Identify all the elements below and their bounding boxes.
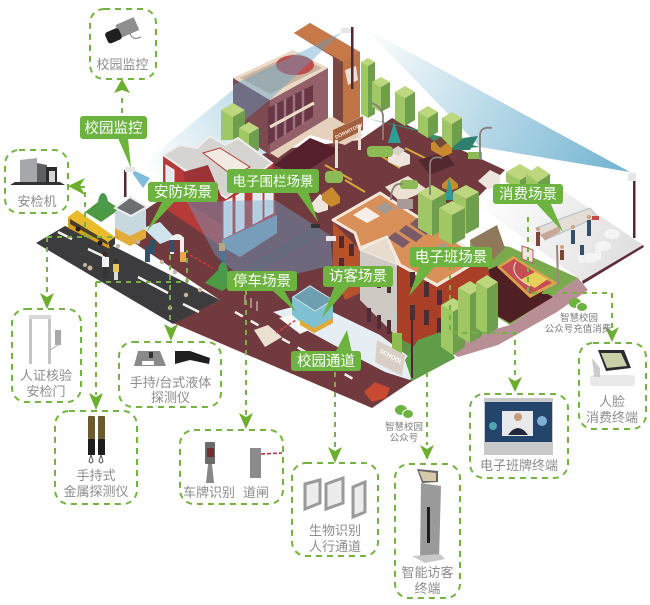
icon: class board screen: [484, 398, 553, 455]
scene label: electronic fence: 电子围栏场景: [232, 174, 314, 189]
camera beam over security building: [187, 200, 333, 285]
scene label: security: [147, 182, 218, 231]
icon: walk-through gate: [29, 315, 61, 364]
scene label: consumption: [493, 184, 563, 232]
school bus: [68, 210, 115, 249]
security checkpoint gates and crowd: [83, 222, 258, 311]
device card: plate recognition and barrier: 车牌识别: [183, 485, 235, 500]
device card: handheld and desktop liquid detector: 探测仪: [151, 390, 190, 405]
device card: handheld metal detector: 金属探测仪: [63, 484, 129, 499]
arrow heads: [40, 79, 619, 463]
scene label: campus monitoring: 校园监控: [84, 120, 142, 137]
street lamps and cameras: [371, 103, 492, 200]
device card: handheld and desktop liquid detector: [119, 342, 221, 407]
dormitory sign: [333, 116, 365, 168]
bleachers: [470, 225, 505, 268]
scene label: visitor: [322, 266, 393, 318]
device card: handheld metal detector: [55, 411, 137, 504]
device card: visitor kiosk: 终端: [414, 581, 441, 596]
trees near gate: [98, 193, 228, 284]
scene label: campus monitoring: [80, 116, 147, 168]
device card: face payment terminal: [579, 343, 646, 429]
icon: kiosk: [412, 469, 445, 563]
scene label: consumption: 消费场景: [499, 186, 557, 203]
device card: handheld metal detector: 手持式: [76, 468, 116, 483]
WeChat public account: top-up: 智慧校园: [560, 312, 598, 324]
scene label: electronic class board: [409, 247, 492, 296]
icon: plate recognition camera: [205, 442, 215, 483]
front tree blocks: [418, 185, 498, 355]
device card: biometric pedestrian gate: 人行通道: [309, 539, 361, 554]
device card: ID verification gate: 人证核验: [20, 368, 72, 383]
gatehouse: [115, 196, 147, 246]
icon: security camera: [104, 17, 141, 44]
WeChat public account: campus: [385, 405, 423, 444]
icon: road barrier gate: [250, 448, 282, 478]
icon: metal detector wands: [88, 416, 105, 463]
school sign: SCHOOL: [378, 349, 404, 366]
icon: handheld detector: [175, 351, 210, 364]
icon: turnstiles: [305, 478, 365, 517]
device card: biometric pedestrian gate: 生物识别: [309, 523, 361, 538]
consumption plaza: [478, 175, 643, 281]
electronic fence: [245, 225, 320, 278]
device card: visitor kiosk: 智能访客: [401, 565, 454, 580]
court ground shadow: [440, 278, 588, 357]
device card: ID verification gate: [12, 309, 81, 402]
device card: biometric pedestrian gate: [292, 463, 378, 556]
device card: handheld and desktop liquid detector: 手持/台式液体: [130, 375, 211, 390]
parking booth and plate reader: [254, 285, 390, 402]
basketball court: [462, 245, 558, 323]
scene label: campus passage: 校园通道: [297, 353, 355, 370]
scene label: visitor: 访客场景: [329, 268, 387, 285]
scene label: electronic fence: [227, 169, 319, 222]
dormitory sign: DORMITORY: [334, 122, 365, 141]
device card: face payment terminal: 消费终端: [586, 410, 638, 425]
device card: electronic class board: 电子班牌终端: [480, 458, 558, 473]
parking lot with cars: [310, 122, 500, 213]
scene label: electronic class board: 电子班场景: [415, 249, 487, 266]
school plaza: [273, 302, 455, 381]
scene label: parking: [227, 271, 297, 312]
campus maroon ground: [115, 118, 505, 408]
camera beam: right: [365, 28, 630, 172]
device card: x-ray security scanner: [5, 150, 68, 213]
monitoring poles: [124, 27, 636, 241]
scene label: security: 安防场景: [154, 184, 212, 201]
school sign: [375, 340, 405, 376]
road markings: [58, 232, 355, 380]
security building: [163, 136, 277, 257]
back tree row: [506, 164, 550, 190]
scene label: parking: 停车场景: [233, 273, 291, 290]
device card: x-ray security scanner: 安检机: [17, 194, 57, 209]
device card: plate recognition and barrier: 道闸: [243, 485, 269, 500]
tree blocks behind dormitory: [361, 58, 480, 150]
WeChat public account: campus: 智慧校园: [385, 421, 423, 433]
isometric campus scene: [36, 23, 644, 408]
dark asphalt road: [36, 226, 220, 324]
device card: plate recognition and barrier: [180, 430, 283, 504]
icon: POS terminal: [590, 350, 635, 386]
device card: face payment terminal: 人脸: [599, 394, 625, 409]
school building: [333, 193, 497, 360]
device card: ID verification gate: 安检门: [26, 384, 66, 399]
scene label: campus passage: [291, 330, 361, 371]
dormitory building: [233, 23, 363, 175]
WeChat public account: top-up: [545, 298, 611, 335]
canteen counters and customers: [536, 208, 620, 263]
tree blocks left of dormitory: [221, 103, 259, 155]
device card: electronic class board: [470, 394, 568, 478]
icon: desktop detector: [134, 351, 166, 366]
camera beam: left: [133, 88, 275, 205]
icon: scanner: [10, 158, 65, 185]
WeChat public account: campus: 公众号: [390, 433, 418, 444]
dashed connector lines: [47, 93, 612, 448]
device card: campus monitoring camera: [90, 9, 156, 79]
device card: visitor kiosk: [395, 464, 460, 598]
grass patches: [85, 198, 578, 381]
WeChat public account: top-up: 公众号充值消费: [545, 323, 611, 335]
device card: campus monitoring camera: 校园监控: [96, 57, 149, 72]
